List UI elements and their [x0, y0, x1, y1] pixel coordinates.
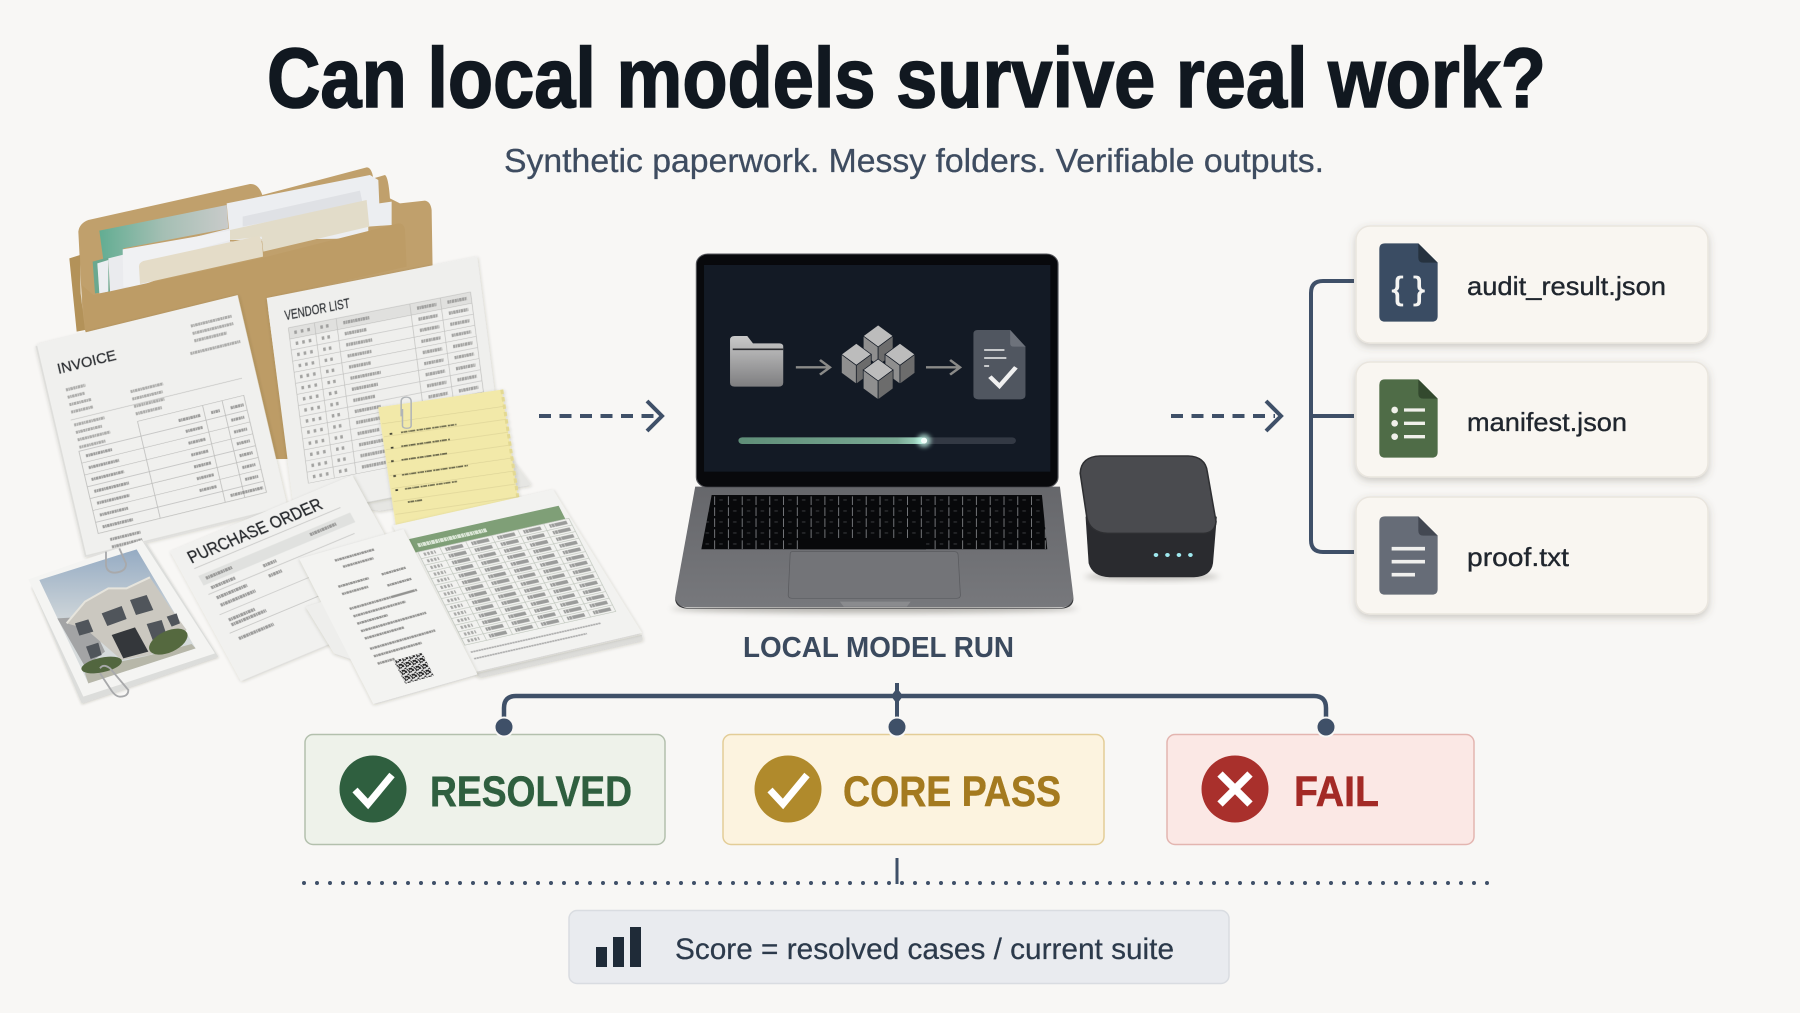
fail label: FAIL [1294, 768, 1379, 816]
vendor list heading: VENDOR LIST [284, 296, 351, 324]
purchase order sheet [170, 475, 423, 681]
dotted divider [304, 881, 1496, 885]
icon: bar chart [596, 927, 641, 967]
invoice heading: INVOICE [55, 346, 118, 377]
laptop shadow [671, 604, 1077, 613]
invoice sheet [35, 295, 287, 557]
mini PC lid [1080, 456, 1216, 533]
status lights [1154, 553, 1193, 557]
icon: gold check [754, 756, 822, 822]
laptop base [675, 487, 1073, 609]
photo stack with building [28, 540, 218, 703]
resolved label: RESOLVED [430, 768, 632, 816]
file name: proof.txt [1467, 542, 1570, 572]
green sheet grid [418, 518, 623, 659]
core pass label: CORE PASS [843, 768, 1061, 816]
icon: green check [340, 756, 406, 822]
output card: audit_result.json [1356, 226, 1708, 343]
folder icon [730, 336, 783, 387]
score tick [896, 858, 898, 884]
progress head [921, 438, 927, 444]
icon: JSON file [1379, 243, 1438, 322]
progress bar fill [738, 437, 925, 444]
illustration: pile of messy paperwork [28, 167, 643, 704]
dashed arrow: documents to laptop [539, 401, 662, 431]
arrow in screen one [796, 360, 830, 375]
laptop screen [696, 254, 1058, 487]
arrow in screen two [926, 360, 960, 375]
invoice lines [56, 315, 279, 550]
mini PC shadow [1085, 573, 1219, 581]
vendor list sheet [267, 257, 505, 516]
sticky note [378, 390, 519, 526]
green table sheet [392, 490, 643, 677]
document check icon [973, 330, 1025, 399]
folder icon opening [733, 347, 783, 352]
score formula box [569, 910, 1229, 984]
model cubes icon [841, 325, 915, 400]
vendor table [288, 292, 491, 483]
icon: red cross [1202, 756, 1268, 822]
score formula: Score = resolved cases / current suite [675, 933, 1174, 966]
file name: audit_result.json [1467, 271, 1666, 301]
paperclip on sticky note [401, 397, 411, 428]
purchase order lines [194, 505, 385, 641]
icon: JSON file: { } [1392, 270, 1425, 306]
status: core pass [723, 734, 1104, 844]
receipts with QR code [299, 529, 477, 704]
subtitle: Synthetic paperwork. Messy folders. Verifiable outputs. [504, 142, 1324, 179]
screen display [704, 265, 1050, 472]
building [57, 577, 196, 683]
mini PC body [1086, 517, 1217, 577]
verdict connector tree [494, 683, 1336, 736]
mini PC [1080, 456, 1219, 581]
icon: text file [1379, 516, 1438, 595]
QR code [394, 653, 434, 684]
output card: manifest.json [1356, 362, 1708, 477]
status: fail [1167, 734, 1474, 844]
folder with papers [69, 167, 433, 460]
laptop [671, 254, 1077, 613]
icon: manifest file [1379, 379, 1438, 458]
purchase order heading: PURCHASE ORDER [184, 494, 326, 567]
dashed arrow: laptop to outputs [1171, 401, 1281, 431]
title: Can local models survive real work? [267, 31, 1546, 125]
photo [39, 549, 196, 683]
progress glow [917, 434, 931, 447]
file name: manifest.json [1467, 407, 1627, 437]
vendor list under-sheet [304, 453, 531, 511]
paperclips on photo [100, 548, 128, 697]
status: resolved [305, 734, 665, 844]
output bracket connector [1311, 281, 1354, 552]
local model run label: LOCAL MODEL RUN [743, 632, 1014, 664]
progress bar track [738, 437, 1016, 444]
output card: proof.txt [1356, 497, 1708, 614]
